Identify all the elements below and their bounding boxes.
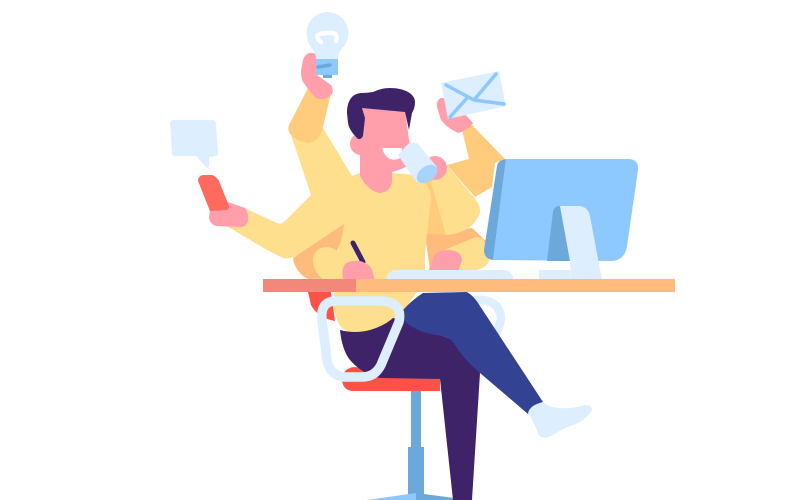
hand holding mug [423,156,447,180]
sock [528,402,592,438]
chair back [308,292,335,321]
keyboard [386,270,514,280]
head and neck [350,106,414,193]
far armrest [473,300,501,336]
chair post [408,391,424,500]
mug arm shadow [415,168,452,235]
lower left arm orange sleeve [293,224,345,281]
speech bubble [170,120,218,168]
phone [198,175,229,211]
legs: near trouser [403,292,543,414]
lower right arm [426,228,490,270]
mouth [382,148,402,160]
chair base [367,493,454,500]
legs: far trouser [340,318,480,500]
monitor stand [539,206,602,280]
phone hand [209,202,248,227]
envelope [441,71,506,119]
mug [398,142,441,187]
writing hand [342,261,375,281]
light bulb [306,12,348,78]
monitor [484,159,638,261]
envelope arm sleeve [447,125,505,197]
torso and left arm [225,128,431,333]
pen [353,243,363,262]
mug arm sleeve [431,163,480,235]
hand holding envelope [437,98,473,133]
desk [263,279,675,292]
near armrest [322,301,400,377]
chair seat [342,367,440,391]
hair [347,88,415,139]
hand on keyboard [429,250,462,272]
hand holding bulb [301,53,333,99]
raised arm sleeve [288,88,331,143]
